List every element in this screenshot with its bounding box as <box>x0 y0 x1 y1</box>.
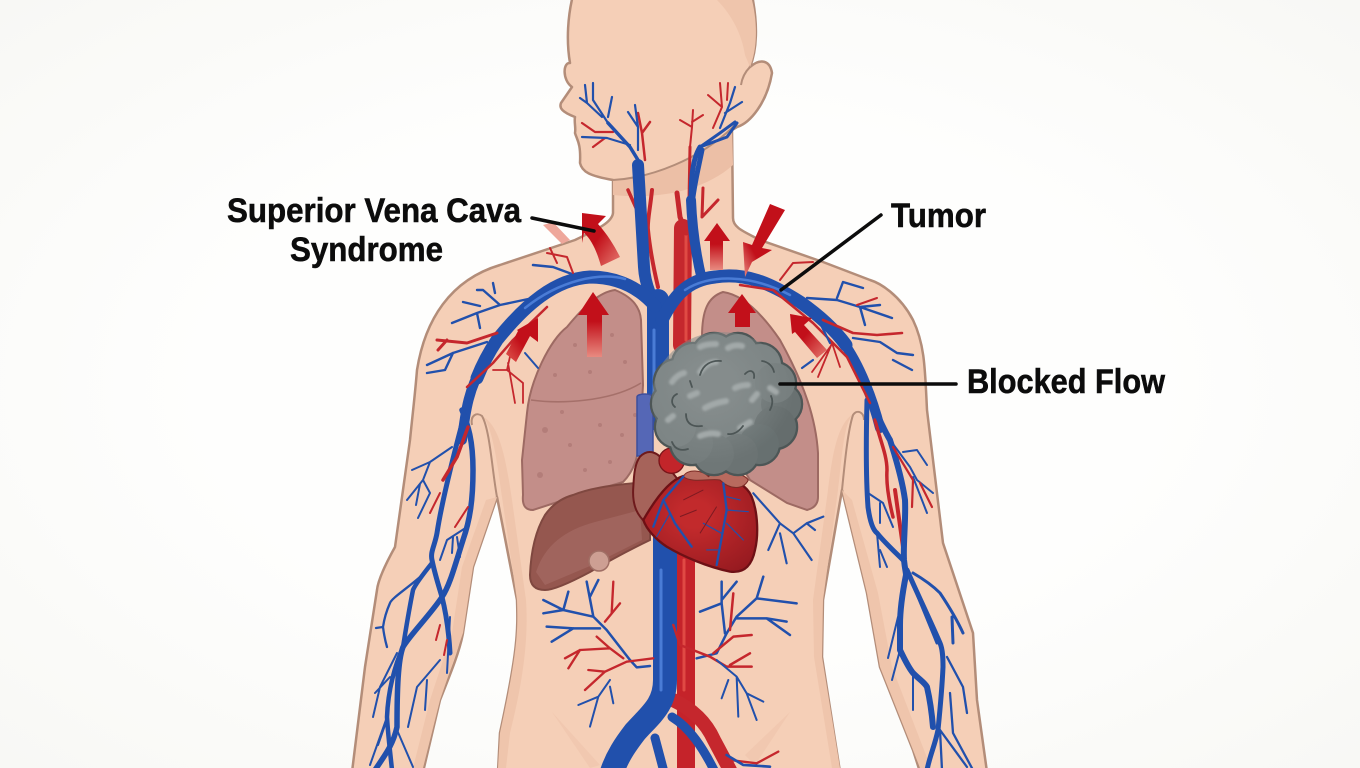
tumor core shading <box>652 332 792 464</box>
heart branch to the right <box>753 493 823 563</box>
skin silhouette <box>352 0 987 768</box>
leader: tumor <box>781 215 881 290</box>
arrow: left axilla diagonal <box>506 318 538 362</box>
arrow: neck left curved <box>582 213 620 266</box>
iliac artery <box>673 700 730 768</box>
coronary vessels <box>653 477 727 565</box>
tumor highlights <box>668 344 776 436</box>
label: Blocked Flow: Blocked Flow <box>967 363 1166 401</box>
main veins <box>462 147 880 768</box>
right brachiocephalic vein <box>662 276 846 345</box>
arrow: right lung small up <box>728 294 756 327</box>
ventricles <box>643 476 757 572</box>
left arm veins <box>370 410 473 768</box>
arrow: neck right up <box>704 223 730 270</box>
tumor crease marks <box>672 361 774 450</box>
lungs <box>522 290 818 510</box>
aortic bulb <box>659 448 684 473</box>
left lung lobe line <box>531 383 641 402</box>
left jugular vein <box>638 165 662 318</box>
label: Superior Vena Cava Syndrome: Superior Vena Cava <box>227 192 522 230</box>
human body figure <box>352 0 987 768</box>
arrow: left lung up <box>578 292 609 357</box>
shoulder vessel branches <box>427 248 913 403</box>
jaw, ear and armpit contour lines <box>472 67 864 497</box>
heart <box>633 448 823 572</box>
tumor mass <box>652 332 801 474</box>
liver <box>530 482 650 590</box>
abdominal vessels <box>543 577 797 767</box>
right atrium <box>633 452 678 523</box>
face and neck vessel branches <box>580 83 742 160</box>
leader lines <box>532 215 956 384</box>
inferior vena cava <box>612 525 665 768</box>
aorta and great arteries <box>628 147 730 768</box>
liver highlight <box>536 510 642 585</box>
label: Tumor: Tumor <box>891 197 986 235</box>
right arm veins <box>866 400 973 768</box>
right jugular vein <box>691 147 700 205</box>
tumor outline lobes <box>652 334 801 474</box>
skin shading <box>413 0 931 768</box>
arrow: right axilla diagonal <box>790 314 827 358</box>
right lung <box>702 292 818 510</box>
great vessels top <box>683 471 748 487</box>
gallbladder <box>589 551 609 571</box>
flow arrows <box>506 204 827 362</box>
superior vena cava <box>647 300 669 420</box>
neck arteries <box>628 190 637 210</box>
label: Superior Vena Cava Syndrome <box>227 192 522 269</box>
left lung <box>522 290 643 510</box>
pale stripe near neck <box>543 222 570 244</box>
small SVC stub <box>637 394 653 456</box>
leader: superior vena cava syndrome <box>532 218 594 231</box>
left brachiocephalic vein <box>477 277 655 378</box>
tumor fill lobes <box>652 334 801 474</box>
leader: blocked flow <box>780 382 956 386</box>
arrow: big inward down <box>743 204 785 277</box>
lung mottling <box>537 333 637 478</box>
label: Superior Vena Cava Syndrome: Syndrome <box>290 231 443 269</box>
